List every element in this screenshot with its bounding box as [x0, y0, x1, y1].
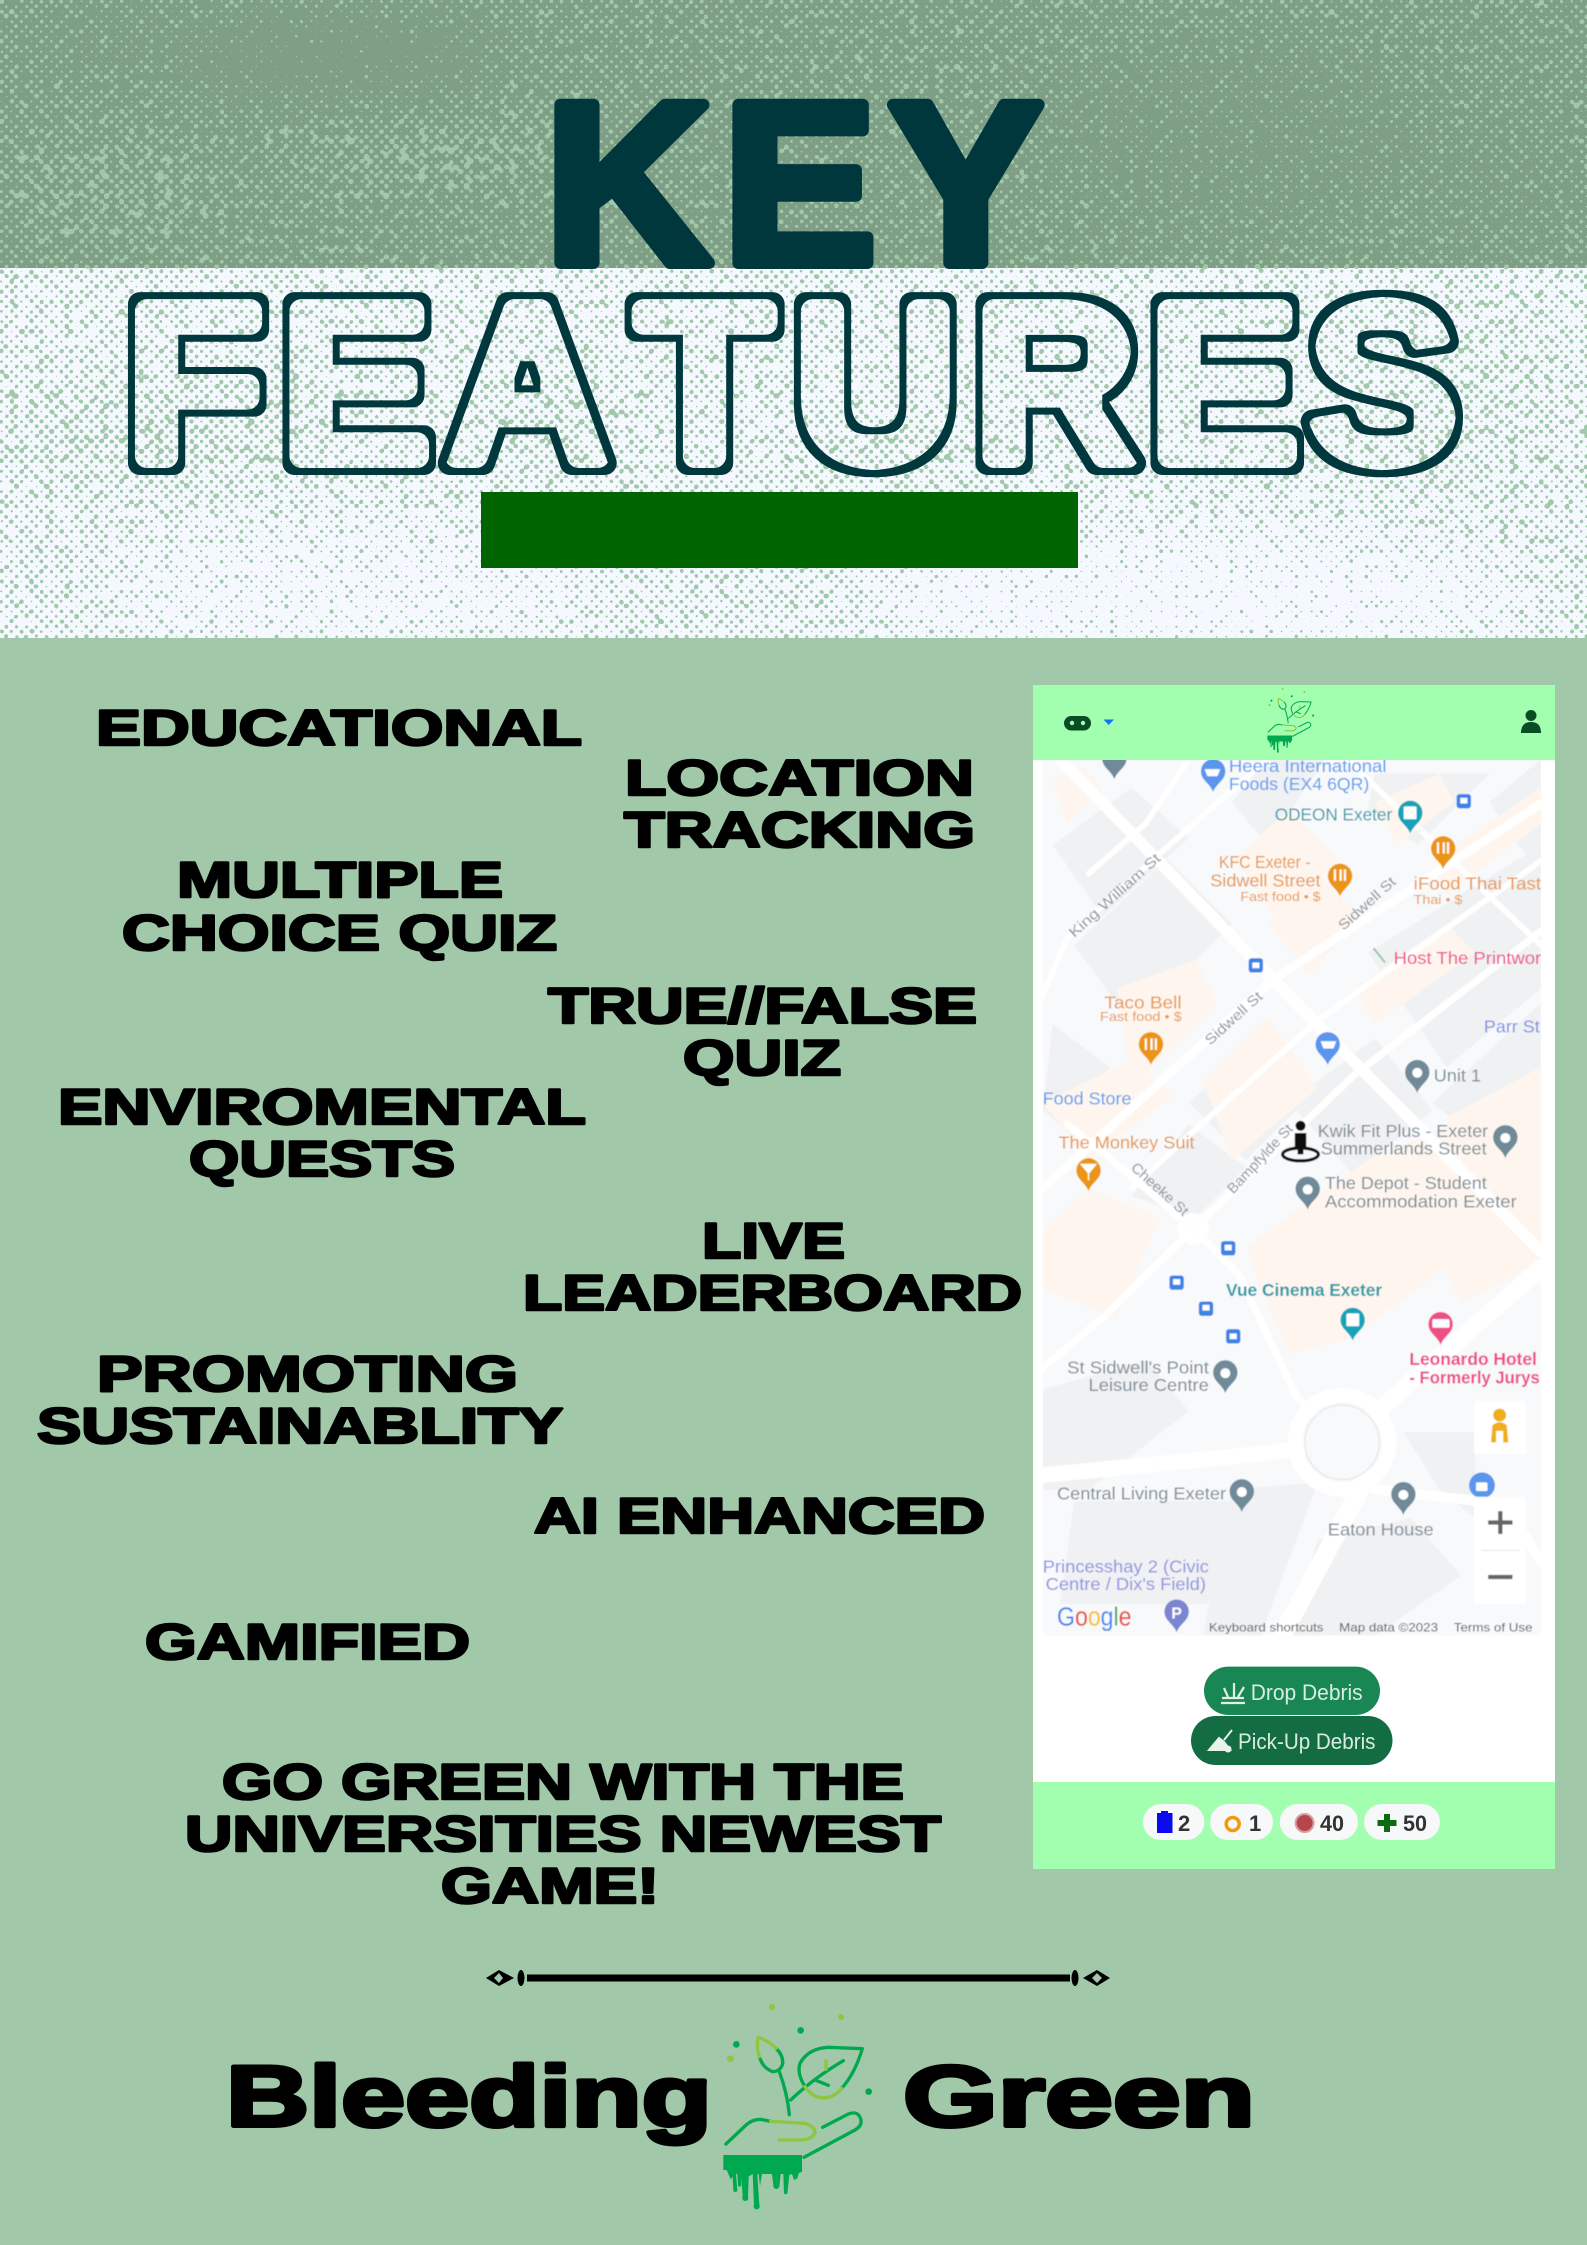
map labels: Foods (EX4 6QR): [1229, 774, 1369, 794]
map: [1034, 746, 1541, 1636]
map labels: KFC Exeter -: [1219, 852, 1311, 872]
map labels: Centre / Dix's Field): [1046, 1574, 1206, 1594]
map labels: Keyboard shortcuts: [1209, 1620, 1323, 1634]
map labels: The Monkey Suit: [1058, 1133, 1195, 1153]
label: gamified: GAMIFIED: [145, 1614, 470, 1670]
map labels: Unit 1: [1434, 1065, 1481, 1085]
tagline: UNIVERSITIES NEWEST: [185, 1806, 941, 1862]
icon: gamepad: [1064, 716, 1091, 730]
map labels: iFood Thai Tast: [1414, 873, 1541, 893]
map labels: ODEON Exeter: [1275, 805, 1392, 825]
body background: [0, 638, 1587, 2245]
tagline: GO GREEN WITH THE: [222, 1754, 904, 1810]
label: enviromental quests: [58, 1079, 586, 1187]
bus stop icons: [1169, 794, 1495, 1498]
map labels: Thai • $: [1414, 892, 1462, 907]
label: live leaderboard: LIVE: [702, 1213, 845, 1269]
map labels: Bampfylde St: [1224, 1121, 1297, 1197]
icon: roulette: [1296, 1814, 1314, 1832]
label: educational: EDUCATIONAL: [96, 700, 582, 756]
brand name: Green: Green: [903, 2049, 1255, 2145]
button: pick-up debris: [1191, 1716, 1392, 1765]
button: drop debris: [1204, 1667, 1380, 1715]
tagline: GAME!: [441, 1858, 659, 1914]
player marker: [1283, 1121, 1318, 1161]
bottom stats bar: 1: [1249, 1811, 1261, 1836]
label: true false quiz: QUIZ: [683, 1030, 841, 1086]
street view control: [1474, 1408, 1509, 1454]
map labels: Central Living Exeter: [1057, 1484, 1226, 1504]
label: live leaderboard: LEADERBOARD: [523, 1265, 1022, 1321]
map labels: Kwik Fit Plus - Exeter: [1318, 1121, 1488, 1141]
white band background: [0, 268, 1587, 638]
map labels: Leonardo Hotel: [1409, 1349, 1537, 1369]
icon: clipboard: [1157, 1811, 1172, 1833]
map labels: Fast food • $: [1240, 889, 1321, 904]
map labels: Map data ©2023: [1339, 1620, 1438, 1634]
map labels: St Sidwell's Point: [1067, 1358, 1209, 1378]
button: drop debris: Drop Debris: [1251, 1680, 1363, 1705]
map labels: Leisure Centre: [1089, 1375, 1209, 1395]
map labels: Summerlands Street: [1321, 1138, 1487, 1158]
title: FEATURES outlined: FEATURES: [124, 254, 1460, 512]
map labels: Host The Printwor: [1394, 948, 1541, 968]
map labels: Princesshay 2 (Civic: [1043, 1557, 1209, 1577]
map labels: Google: [1057, 1604, 1132, 1632]
label: promoting sustainability: SUSTAINABLITY: [37, 1398, 563, 1454]
label: enviromental quests: QUESTS: [189, 1131, 455, 1187]
app header bar: [1033, 685, 1555, 760]
map labels: The Depot - Student: [1325, 1173, 1487, 1193]
brand name: Bleeding: Bleeding: [226, 2049, 712, 2145]
tagline: [185, 1754, 941, 1914]
logo: hand with sprout: [723, 2004, 872, 2209]
map labels: Terms of Use: [1454, 1620, 1533, 1634]
map labels: Parr St: [1484, 1017, 1540, 1037]
map labels: Sidwell St: [1335, 874, 1399, 934]
label: location tracking: LOCATION: [625, 750, 974, 806]
map labels: Fast food • $: [1100, 1009, 1182, 1024]
ornamental divider: [486, 1970, 1110, 1986]
top band background: [0, 0, 1587, 268]
bottom stats bar: [1033, 1782, 1555, 1869]
map labels: Eaton House: [1328, 1519, 1434, 1539]
icon: profile: [1521, 710, 1541, 733]
button: pick-up debris: Pick-Up Debris: [1238, 1729, 1376, 1754]
icon: flame: [1226, 1818, 1239, 1830]
label: promoting sustainability: PROMOTING: [97, 1346, 518, 1402]
label: multiple choice quiz: MULTIPLE: [177, 852, 503, 908]
map labels: [1043, 756, 1541, 1634]
label: location tracking: [624, 750, 975, 858]
map labels: Taco Bell: [1104, 992, 1182, 1012]
bottom stats bar: 50: [1403, 1811, 1427, 1836]
map labels: Heera International: [1229, 756, 1386, 776]
map pins: P: [1171, 1605, 1182, 1622]
title: KEY: KEY: [545, 55, 1042, 312]
map labels: Food Store: [1043, 1088, 1132, 1108]
icon: clover: [1378, 1814, 1396, 1832]
label: true false quiz: TRUE//FALSE: [548, 978, 977, 1034]
label: enviromental quests: ENVIROMENTAL: [58, 1079, 586, 1135]
halftone texture: [0, 0, 1587, 780]
map labels: Sidwell St: [1202, 989, 1266, 1049]
icon: dropdown caret: [1104, 720, 1114, 725]
label: multiple choice quiz: [122, 852, 557, 961]
label: promoting sustainability: [37, 1346, 563, 1454]
feature labels: [37, 700, 1022, 1914]
zoom control: [1474, 1496, 1514, 1580]
icon: small logo: [1267, 688, 1314, 753]
bottom stats bar: 2: [1178, 1811, 1190, 1836]
bottom stats bar: 40: [1320, 1811, 1344, 1836]
map labels: Vue Cinema Exeter: [1226, 1280, 1382, 1300]
map labels: Sidwell Street: [1210, 871, 1321, 891]
map labels: Accommodation Exeter: [1325, 1191, 1517, 1211]
label: location tracking: TRACKING: [624, 802, 975, 858]
map labels: - Formerly Jurys: [1409, 1368, 1540, 1388]
map labels: Cheeke St: [1127, 1160, 1191, 1220]
label: true false quiz: [548, 978, 977, 1086]
label: live leaderboard: [523, 1213, 1022, 1321]
label: AI enhanced: AI ENHANCED: [534, 1488, 985, 1544]
green bar: [481, 492, 1078, 568]
map pins: [1076, 746, 1518, 1632]
map labels: King William St: [1066, 851, 1164, 941]
label: multiple choice quiz: CHOICE QUIZ: [122, 905, 557, 961]
panel: phone screenshot: [226, 685, 1555, 2209]
